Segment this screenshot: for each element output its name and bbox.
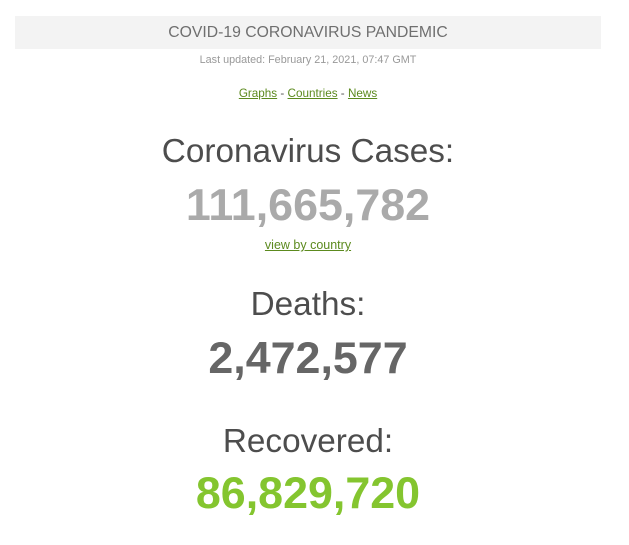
title: COVID-19 CORONAVIRUS PANDEMIC [168, 24, 448, 41]
heading: deaths: Deaths: [251, 286, 365, 323]
navigation links: Graphs - Countries - News [239, 87, 377, 100]
number: recovered: 86,829,720 [196, 468, 420, 518]
last updated text: Last updated: February 21, 2021, 07:47 GMT [200, 54, 416, 66]
number: cases: 111,665,782 [186, 180, 430, 230]
number: deaths: 2,472,577 [208, 333, 408, 383]
title banner [15, 16, 601, 49]
link: view by country: view by country [265, 238, 351, 252]
heading: coronavirus cases: Coronavirus Cases: [162, 133, 454, 170]
heading: recovered: Recovered: [223, 423, 393, 460]
